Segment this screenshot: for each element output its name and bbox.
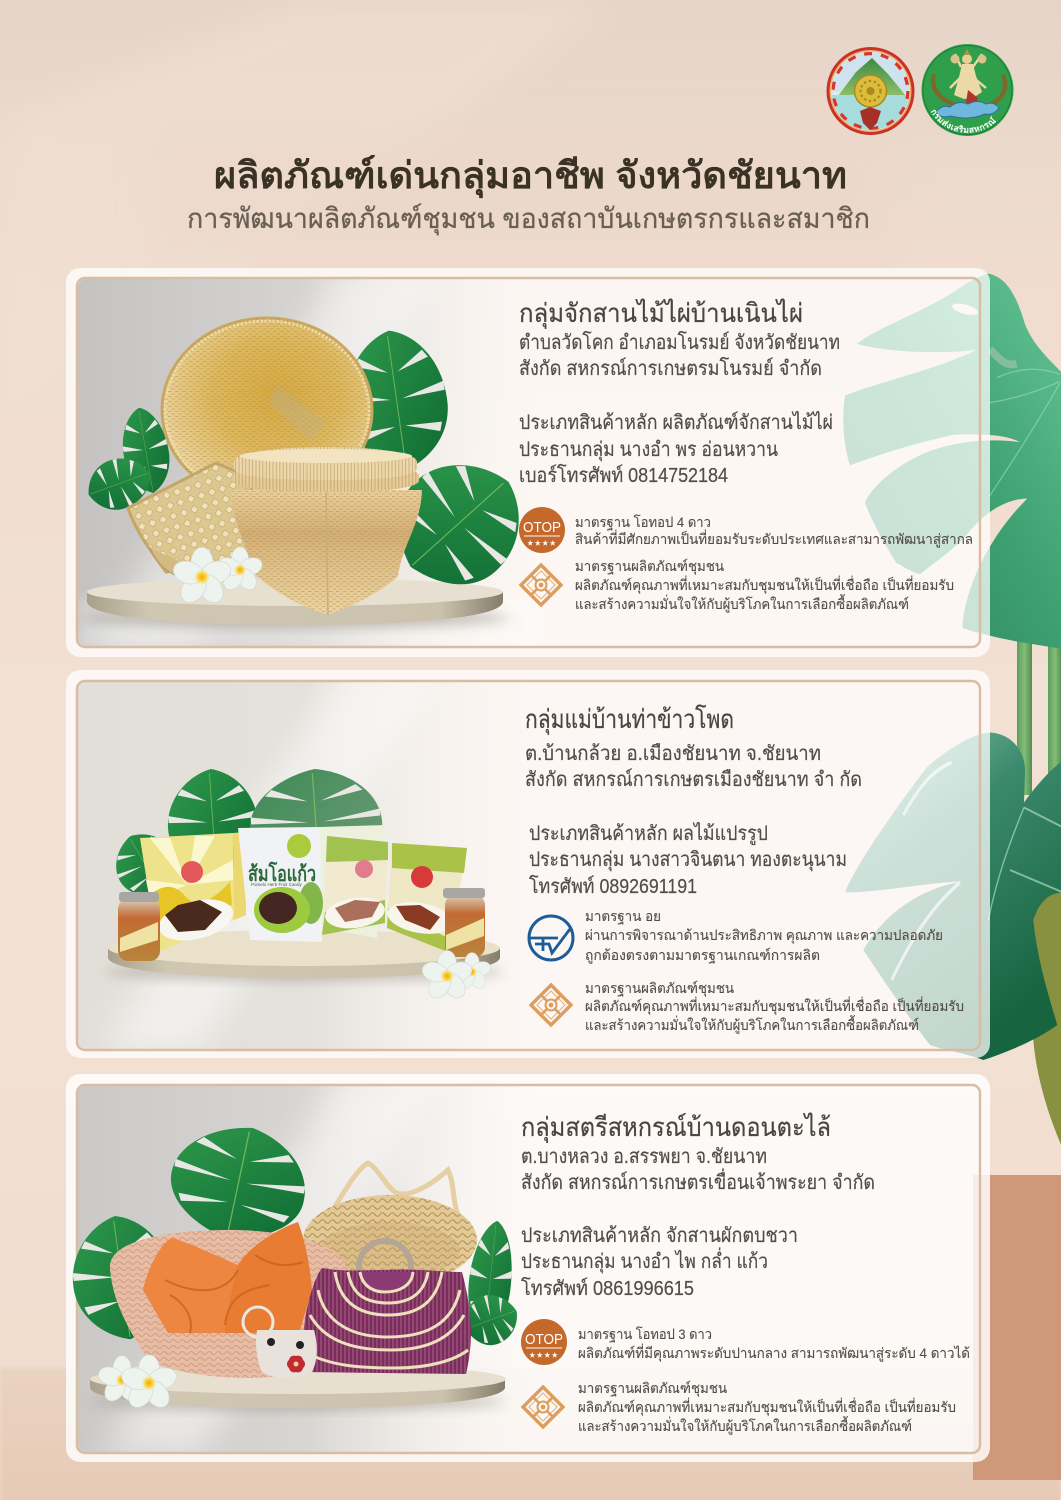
title: ผลิตภัณฑ์เด่นกลุ่มอาชีพ จังหวัดชัยนาท — [214, 155, 847, 199]
community standard text — [585, 980, 964, 1034]
group details: ต.บางหลวง อ.สรรพยา จ.ชัยนาท — [521, 1146, 767, 1168]
group details: สังกัด สหกรณ์การเกษตรเมืองชัยนาท จำ กัด — [525, 768, 862, 791]
group details: ต.บ้านกล้วย อ.เมืองชัยนาท จ.ชัยนาท — [525, 743, 821, 765]
OTOP standard text: สินค้าที่มีศักยภาพเป็นที่ยอมรับระดับประเทศและสามารถพัฒนาสู่สากล — [575, 530, 973, 548]
package: pomelo candy pouch: Pomelo Herb Fruit Candy — [251, 882, 303, 887]
OTOP standard text — [575, 514, 973, 548]
group details: ตำบลวัดโคก อำเภอมโนรมย์ จังหวัดชัยนาท — [519, 331, 840, 354]
plant behind the panels — [843, 274, 1061, 1480]
icon: OTOP badge — [519, 507, 565, 553]
honey jar right — [443, 888, 485, 957]
product image: water hyacinth baskets — [64, 1113, 525, 1412]
lower monstera leaf — [845, 732, 1061, 1150]
icon: community product diamond — [531, 985, 571, 1025]
community standard text — [578, 1380, 956, 1435]
OTOP standard text — [578, 1326, 970, 1362]
plumeria flowers — [96, 1355, 179, 1412]
group details: กลุ่มจักสานไม้ไผ่บ้านเนินไผ่ — [519, 298, 803, 329]
small white bag with flower — [243, 1307, 317, 1378]
group details: ประธานกลุ่ม นางสาวจินตนา ทองตะนุนาม — [529, 849, 847, 872]
stems — [1017, 630, 1061, 795]
OTOP standard text: มาตรฐาน โอทอป 3 ดาว — [578, 1326, 712, 1343]
community standard text — [575, 558, 954, 613]
group details: เบอร์โทรศัพท์ 0814752184 — [519, 464, 728, 487]
group details: โทรศัพท์ 0861996615 — [521, 1277, 694, 1300]
community standard text: มาตรฐานผลิตภัณฑ์ชุมชน — [578, 1380, 727, 1397]
group details — [519, 298, 840, 487]
pink basket with orange cushion — [110, 1222, 347, 1378]
plumeria flowers — [170, 547, 264, 607]
FDA standard text: ผ่านการพิจารณาด้านประสิทธิภาพ คุณภาพ และความปลอดภัย — [585, 927, 943, 944]
logo: cooperative department seal: กรมส่งเสริมสหกรณ์ — [930, 110, 996, 133]
upper monstera leaf — [843, 274, 1061, 649]
group details — [525, 704, 862, 898]
product image: bamboo baskets — [80, 318, 547, 627]
package: back white box — [320, 825, 387, 938]
FDA standard text: ถูกต้องตรงตามมาตรฐานเกณฑ์การผลิต — [585, 947, 820, 964]
group details: ประธานกลุ่ม นางอำ ไพ กล่ำ แก้ว — [521, 1247, 768, 1274]
package: pomelo candy pouch — [238, 827, 323, 942]
plumeria flowers — [420, 950, 493, 1002]
round bamboo tray — [162, 318, 372, 502]
panel: housewives processed fruit group — [66, 670, 990, 1058]
community standard text: มาตรฐานผลิตภัณฑ์ชุมชน — [575, 558, 724, 575]
group details — [521, 1112, 875, 1300]
community standard text: ผลิตภัณฑ์คุณภาพที่เหมาะสมกับชุมชนให้เป็นที่เชื่อถือ เป็นที่ยอมรับ — [585, 997, 964, 1015]
community standard text: และสร้างความมั่นใจให้กับผู้บริโภคในการเลือกซื้อผลิตภัณฑ์ — [575, 594, 909, 613]
group details: ประเภทสินค้าหลัก ผลิตภัณฑ์จักสานไม้ไผ่ — [519, 411, 833, 434]
package: pomelo candy pouch: ส้มโอแก้ว — [248, 861, 316, 886]
logo: cooperative department seal — [922, 44, 1014, 136]
OTOP standard text: มาตรฐาน โอทอป 4 ดาว — [575, 514, 711, 531]
group details: กลุ่มแม่บ้านท่าข้าวโพด — [525, 704, 734, 735]
community standard text: ผลิตภัณฑ์คุณภาพที่เหมาะสมกับชุมชนให้เป็นที่เชื่อถือ เป็นที่ยอมรับ — [575, 576, 954, 594]
subtitle: การพัฒนาผลิตภัณฑ์ชุมชน ของสถาบันเกษตรกรและสมาชิก — [187, 203, 870, 236]
product image: fruit candy packages — [103, 765, 504, 1002]
panel: women's cooperative water hyacinth group — [64, 1074, 990, 1462]
group details: กลุ่มสตรีสหกรณ์บ้านดอนตะไล้ — [521, 1112, 831, 1143]
icon: community product diamond — [521, 565, 561, 605]
community standard text: ผลิตภัณฑ์คุณภาพที่เหมาะสมกับชุมชนให้เป็นที่เชื่อถือ เป็นที่ยอมรับ — [578, 1398, 956, 1416]
FDA standard text: มาตรฐาน อย — [585, 908, 661, 925]
group details: ประเภทสินค้าหลัก จักสานผักตบชวา — [521, 1225, 798, 1247]
community standard text: และสร้างความมั่นใจให้กับผู้บริโภคในการเลือกซื้อผลิตภัณฑ์ — [578, 1416, 912, 1435]
purple woven bag — [303, 1241, 471, 1374]
package: tamarind candy box — [322, 836, 388, 935]
icon: community product diamond — [523, 1387, 563, 1427]
group details: สังกัด สหกรณ์การเกษตรเขื่อนเจ้าพระยา จำกัด — [521, 1168, 875, 1194]
logo: provincial seal — [826, 47, 914, 135]
panel: bamboo weaving group — [66, 268, 990, 657]
group details: ประเภทสินค้าหลัก ผลไม้แปรรูป — [529, 822, 768, 846]
package: green candy box — [385, 843, 467, 952]
community standard text: มาตรฐานผลิตภัณฑ์ชุมชน — [585, 980, 734, 997]
OTOP standard text: ผลิตภัณฑ์ที่มีคุณภาพระดับปานกลาง สามารถพัฒนาสู่ระดับ 4 ดาวได้ — [578, 1344, 970, 1362]
package: banana candy — [140, 832, 246, 952]
lidded bamboo basket — [232, 447, 422, 615]
pot — [973, 1175, 1061, 1480]
group details: โทรศัพท์ 0892691191 — [529, 875, 697, 898]
honey jar left — [118, 892, 160, 961]
icon: FDA mark — [529, 916, 573, 960]
community standard text: และสร้างความมั่นใจให้กับผู้บริโภคในการเลือกซื้อผลิตภัณฑ์ — [585, 1015, 919, 1034]
FDA standard text — [585, 908, 943, 964]
flat tray with diamond pattern — [128, 463, 252, 572]
cat-ear basket — [303, 1163, 477, 1285]
icon: OTOP badge — [521, 1319, 567, 1365]
group details: สังกัด สหกรณ์การเกษตรมโนรมย์ จำกัด — [519, 357, 822, 380]
group details: ประธานกลุ่ม นางอำ พร อ่อนหวาน — [519, 439, 778, 462]
